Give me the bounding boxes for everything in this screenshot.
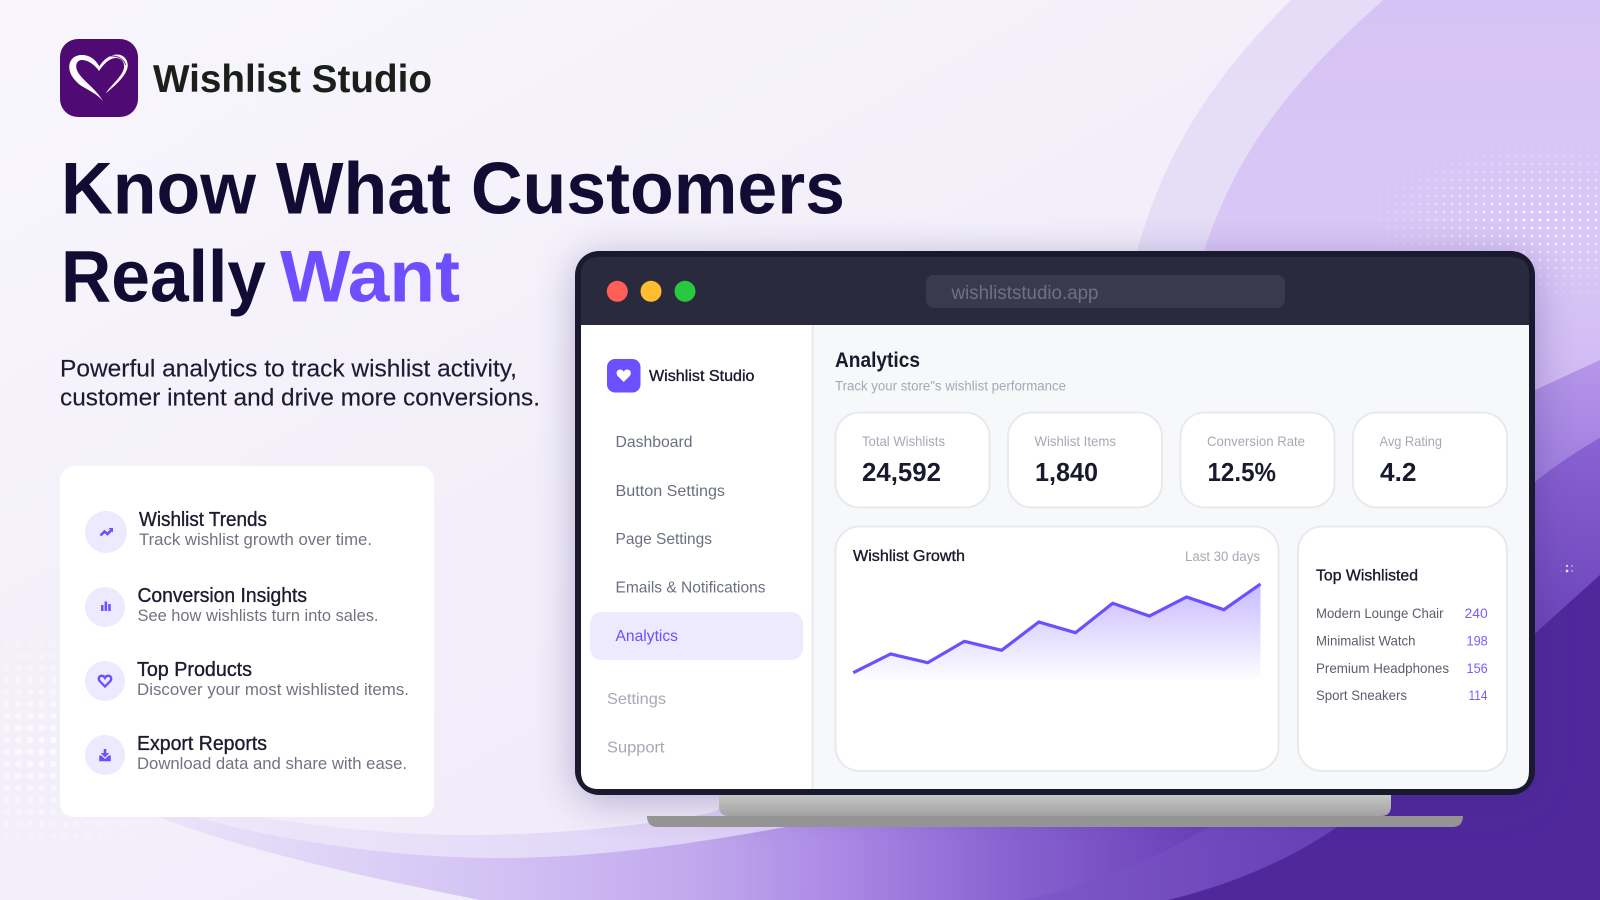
- stat: Total Wishlists: [836, 412, 990, 508]
- feature: Top Products: Top Products: [137, 659, 252, 681]
- feature: Wishlist Trends: Wishlist Trends: [139, 509, 267, 531]
- list: Top Wishlisted: Premium Headphones: [1316, 660, 1449, 676]
- browser title bar: wishliststudio.app: [951, 283, 1098, 304]
- screen frame: [575, 251, 1535, 795]
- list: Top Wishlisted: 198: [1466, 632, 1488, 648]
- sidebar: [581, 325, 814, 789]
- feature: Wishlist Trends: [85, 509, 372, 553]
- feature: Top Products: [85, 659, 409, 701]
- laptop base: [647, 816, 1463, 827]
- subtitle: [60, 356, 540, 412]
- subtitle: Powerful analytics to track wishlist activity,: [60, 356, 517, 382]
- stat: Conversion Rate: [1180, 412, 1334, 508]
- list: Top Wishlisted: Top Wishlisted: [1316, 568, 1418, 584]
- list: Top Wishlisted: 240: [1464, 605, 1488, 621]
- sidebar: Dashboard: [616, 434, 692, 451]
- dashboard heading: Analytics: [835, 349, 920, 372]
- list: Top Wishlisted: 114: [1468, 687, 1488, 703]
- feature: Export Reports: Download data and share with ease.: [137, 754, 407, 773]
- title: Know What Customers: [61, 148, 845, 230]
- dot pattern: top right: [1395, 155, 1598, 285]
- feature: Wishlist Trends: Track wishlist growth over time.: [139, 530, 372, 549]
- list: Top Wishlisted: Minimalist Watch: [1316, 632, 1416, 648]
- stat: Conversion Rate: Conversion Rate: [1207, 433, 1305, 449]
- dashboard heading: [835, 349, 1066, 394]
- feature: Conversion Insights: See how wishlists turn into sales.: [138, 606, 378, 625]
- stat: Avg Rating: 4.2: [1380, 457, 1416, 487]
- dashboard heading: Track your store"s wishlist performance: [835, 378, 1066, 394]
- feature: Top Products: Discover your most wishlisted items.: [137, 680, 409, 699]
- feature: Export Reports: Export Reports: [137, 733, 267, 755]
- list: Top Wishlisted: Modern Lounge Chair: [1316, 605, 1444, 621]
- stat: Wishlist Items: 1,840: [1035, 457, 1098, 487]
- list: Top Wishlisted: Sport Sneakers: [1316, 687, 1407, 703]
- title: Want: [280, 236, 460, 318]
- chart: Wishlist Growth: [836, 526, 1278, 771]
- stat: Avg Rating: [1353, 412, 1507, 508]
- small dots: right: [1560, 564, 1573, 572]
- brand name: Wishlist Studio: [153, 58, 432, 101]
- list: Top Wishlisted: 156: [1466, 660, 1488, 676]
- title: Really: [61, 236, 266, 318]
- stat: Avg Rating: Avg Rating: [1380, 433, 1442, 449]
- subtitle: customer intent and drive more conversions.: [60, 384, 540, 412]
- laptop stand: [719, 795, 1391, 816]
- feature: Conversion Insights: Conversion Insights: [138, 585, 307, 607]
- laptop shadow: [575, 257, 1535, 801]
- main content background: [581, 325, 1529, 789]
- sidebar: Button Settings: [616, 483, 725, 500]
- stat: Total Wishlists: Total Wishlists: [862, 433, 945, 449]
- stat: Wishlist Items: [1008, 412, 1162, 508]
- dot pattern: left: [16, 714, 56, 788]
- list: Top Wishlisted: [1298, 526, 1507, 771]
- chart: Wishlist Growth: Wishlist Growth: [853, 548, 965, 565]
- sidebar: Wishlist Studio: [649, 368, 755, 385]
- feature: Export Reports: [85, 733, 407, 775]
- feature: Conversion Insights: [85, 585, 378, 627]
- chart: Wishlist Growth: Last 30 days: [1185, 549, 1260, 564]
- sidebar: Support: [607, 740, 665, 756]
- sidebar: Page Settings: [616, 531, 712, 548]
- stat: Wishlist Items: Wishlist Items: [1034, 433, 1116, 449]
- title: [61, 148, 845, 318]
- browser title bar: [581, 257, 1529, 325]
- logo: Wishlist Studio app icon: [60, 39, 138, 117]
- sidebar: Emails & Notifications: [616, 580, 766, 596]
- stat: Conversion Rate: 12.5%: [1208, 457, 1276, 487]
- laptop: [575, 251, 1535, 827]
- sidebar: Analytics: [616, 628, 678, 645]
- panel: features: [60, 466, 434, 817]
- sidebar: Settings: [607, 691, 666, 708]
- stat: Total Wishlists: 24,592: [862, 457, 941, 487]
